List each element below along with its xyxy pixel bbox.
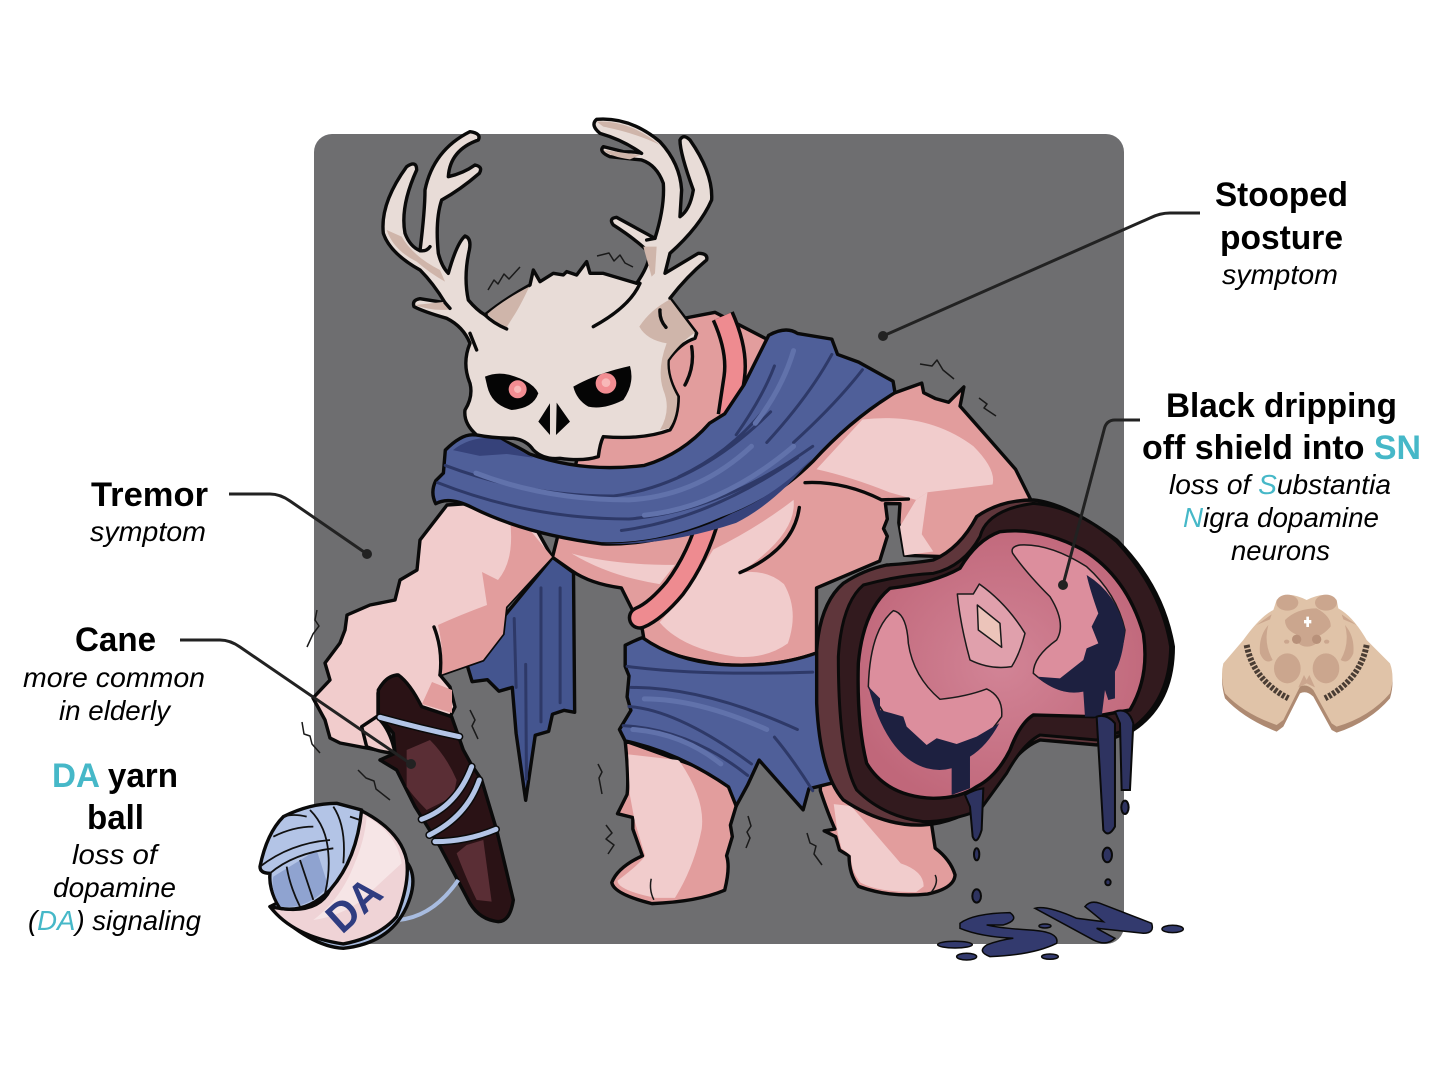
label: DA yarn ball: ball bbox=[87, 799, 144, 837]
scarf cape hanging behind bbox=[466, 557, 575, 800]
yarn strands on cane bbox=[380, 717, 496, 842]
label: tremor: Tremor bbox=[91, 476, 208, 514]
label: tremor bbox=[90, 476, 208, 547]
DA label on yarn: DA bbox=[317, 868, 391, 942]
label: black dripping off shield: neurons bbox=[1231, 535, 1330, 566]
label: stooped posture bbox=[1215, 176, 1348, 290]
tremor marks bbox=[302, 253, 996, 865]
label: black dripping off shield: off shield into SN bbox=[1142, 429, 1421, 467]
body group bbox=[466, 312, 1031, 904]
label: black dripping off shield: loss of Substantia bbox=[1169, 469, 1391, 500]
left arm shading bbox=[438, 520, 552, 675]
panel: gray background bbox=[314, 134, 1124, 944]
label: DA yarn ball: DA yarn bbox=[52, 757, 178, 795]
icon: DA yarn ball bbox=[260, 803, 458, 948]
left black patch bbox=[868, 687, 999, 795]
label: black dripping off shield bbox=[1142, 387, 1421, 566]
arrow: stooped posture bbox=[878, 213, 1200, 341]
illustration: monster character bbox=[260, 119, 1183, 960]
label: DA yarn ball bbox=[28, 757, 201, 936]
label: cane: in elderly bbox=[59, 695, 172, 726]
label: stooped posture: symptom bbox=[1222, 259, 1338, 290]
right black patch bbox=[1037, 575, 1125, 717]
label: cane: Cane bbox=[75, 621, 156, 659]
finger over cane bbox=[362, 717, 395, 753]
center lobe bbox=[957, 584, 1025, 667]
left arm bbox=[313, 500, 552, 753]
right lobe bbox=[1012, 545, 1125, 691]
left leg bbox=[612, 741, 736, 904]
left lobe bbox=[868, 611, 1002, 757]
label: DA yarn ball: loss of bbox=[72, 839, 160, 870]
drips bbox=[965, 710, 1133, 903]
label: black dripping off shield: Black dripping bbox=[1166, 387, 1397, 425]
yarn tail bbox=[398, 880, 458, 920]
label: DA yarn ball: dopamine bbox=[53, 872, 176, 903]
blue scarf around neck bbox=[433, 330, 895, 544]
label: DA yarn ball: (DA) signaling bbox=[28, 905, 201, 936]
label: black dripping off shield: Nigra dopamine bbox=[1183, 502, 1379, 533]
SN puddle bbox=[938, 902, 1183, 960]
label: tremor: symptom bbox=[90, 516, 206, 547]
icon: brainstem cross-section bbox=[1222, 595, 1392, 733]
skull and antlers bbox=[383, 119, 712, 460]
loincloth bbox=[619, 638, 847, 810]
arrow: black dripping bbox=[1058, 420, 1140, 590]
arrow: cane bbox=[180, 640, 416, 769]
intestine necklace lower bbox=[640, 515, 709, 618]
skull shading bbox=[487, 287, 695, 430]
label: cane: more common bbox=[23, 662, 205, 693]
arrow: tremor bbox=[229, 494, 372, 559]
shield bbox=[817, 500, 1183, 960]
label: stooped posture: Stooped bbox=[1215, 176, 1348, 214]
label: stooped posture: posture bbox=[1220, 219, 1343, 257]
label: cane bbox=[23, 621, 205, 726]
intestine necklace upper bbox=[723, 316, 735, 416]
right leg bbox=[820, 760, 955, 895]
cane bbox=[362, 675, 513, 922]
torso and right arm bbox=[552, 312, 1031, 665]
skull nose bbox=[538, 403, 570, 435]
skull eyes bbox=[485, 366, 631, 410]
